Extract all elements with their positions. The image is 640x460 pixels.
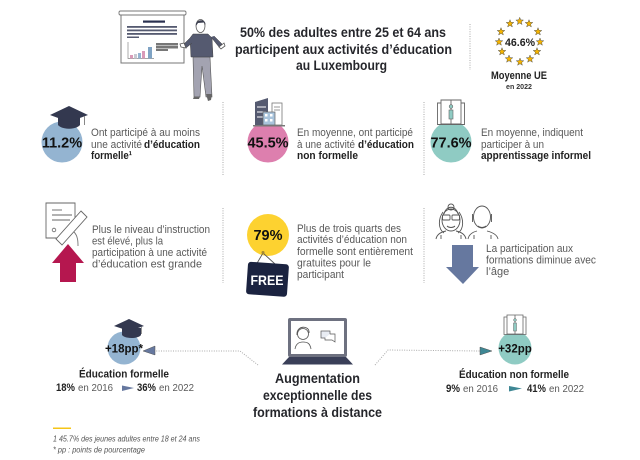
text: age	[486, 243, 596, 278]
title	[235, 25, 452, 73]
panel: formal education growth: Éducation formelle	[79, 368, 169, 380]
text: education level: participation à une activité	[92, 247, 207, 259]
stat: 79% free: 79%	[253, 228, 283, 244]
heading: remote training: Augmentation	[275, 371, 360, 386]
text: non-formal education	[297, 127, 414, 162]
text: education level	[92, 224, 210, 270]
icon: diploma	[46, 203, 87, 246]
text: formal education: Ont participé à au moins	[91, 127, 200, 139]
text: non-formal education: à une activité	[297, 139, 355, 151]
panel: remote training	[253, 318, 382, 420]
text: formal education: d’éducation	[144, 139, 200, 151]
connector: laptop to non-formal education	[375, 347, 492, 365]
yellow circle	[247, 214, 289, 256]
text: age: formations diminue avec	[486, 254, 596, 266]
title: au Luxembourg	[296, 58, 387, 73]
values 2016 to 2022: 41%	[527, 383, 546, 395]
arrow down: blue	[446, 245, 479, 284]
icon: open book	[438, 100, 464, 124]
text: non-formal education: En moyenne, ont participé	[297, 127, 413, 139]
icon: small open book	[504, 315, 526, 334]
stat: informal learning: 77.6%	[430, 136, 472, 152]
icon: older people	[436, 204, 498, 239]
text: age: l’âge	[486, 266, 509, 278]
blue circle 11.2%	[42, 122, 82, 162]
pink circle 45.5%	[248, 122, 288, 162]
text: formal education: formelle¹	[91, 150, 132, 162]
values 2016 to 2022: en 2016	[78, 382, 113, 394]
text: free activities: gratuites pour le	[297, 258, 371, 270]
values 2016 to 2022: 36%	[137, 382, 156, 394]
values 2016 to 2022: 9%	[446, 383, 460, 395]
values 2016 to 2022	[56, 382, 194, 394]
text: formal education: une activité	[91, 139, 142, 151]
title: participent aux activités d’éducation	[235, 42, 452, 57]
text: education level: d’éducation est grande	[92, 258, 202, 270]
text: free activities: formelle sont entièrement	[297, 246, 413, 258]
stat: formal education: 11.2%	[42, 136, 82, 152]
text: informal learning: En moyenne, indiquent	[481, 127, 583, 139]
icon: presenter figure	[180, 20, 225, 101]
EU average badge: Moyenne UE	[491, 70, 547, 82]
text: non-formal education: non formelle	[297, 150, 358, 162]
connector: laptop to formal education	[143, 346, 258, 365]
icon: FREE sign	[246, 251, 289, 297]
teal circle 77.6%	[430, 122, 472, 162]
heading: remote training	[253, 371, 382, 420]
stat: 79% free	[246, 214, 413, 297]
values 2016 to 2022: en 2022	[549, 383, 584, 395]
values 2016 to 2022: en 2016	[463, 383, 498, 395]
values 2016 to 2022: en 2022	[159, 382, 194, 394]
heading: remote training: exceptionnelle des	[263, 388, 372, 403]
heading: remote training: formations à distance	[253, 405, 382, 420]
panel: non-formal education growth: Éducation non formelle	[459, 368, 569, 381]
panel: non-formal education growth	[446, 315, 584, 395]
text: age: La participation aux	[486, 243, 573, 255]
EU average badge: en 2022	[506, 82, 532, 91]
stat: non-formal education: 45.5%	[247, 136, 289, 152]
text: free activities: activités d’éducation non	[297, 234, 407, 246]
text: non-formal education: d’éducation	[358, 139, 414, 151]
panel: non-formal education growth: +32pp	[498, 344, 532, 356]
arrow up: crimson	[52, 244, 84, 282]
footnotes	[53, 434, 201, 454]
footnotes: 1 45.7% des jeunes adultes entre 18 et 24 ans	[53, 434, 201, 444]
text: informal learning: apprentissage informel	[481, 150, 591, 162]
EU average badge	[491, 17, 547, 91]
icon: FREE sign: FREE	[250, 272, 284, 288]
icon: graduation cap	[50, 106, 88, 129]
icon: laptop	[282, 318, 353, 364]
blue circle +18pp	[108, 332, 140, 364]
text: free activities	[297, 223, 413, 281]
stat: non-formal education	[247, 98, 414, 162]
icon: small graduation cap	[114, 319, 144, 338]
values 2016 to 2022	[446, 383, 584, 395]
stat: informal learning	[430, 100, 591, 162]
text: free activities: Plus de trois quarts des	[297, 223, 401, 235]
icon: presentation board	[119, 11, 186, 63]
panel: formal education growth: +18pp*	[105, 344, 144, 356]
text: education level: est élevé, plus la	[92, 236, 164, 248]
values 2016 to 2022: 18%	[56, 382, 75, 394]
text: free activities: participant	[297, 269, 344, 281]
teal circle +32pp	[498, 332, 532, 364]
text: informal learning	[481, 127, 591, 162]
footnotes: * pp : points de pourcentage	[53, 444, 145, 454]
title: 50% des adultes entre 25 et 64 ans	[240, 25, 446, 40]
text: informal learning: participer à un	[481, 139, 544, 151]
icon: buildings	[253, 98, 285, 126]
stat: formal education	[42, 106, 200, 162]
text: formal education	[91, 127, 200, 162]
EU average badge: 46.6%	[505, 37, 535, 49]
text: education level: Plus le niveau d’instruction	[92, 224, 210, 236]
panel: formal education growth	[56, 319, 194, 394]
